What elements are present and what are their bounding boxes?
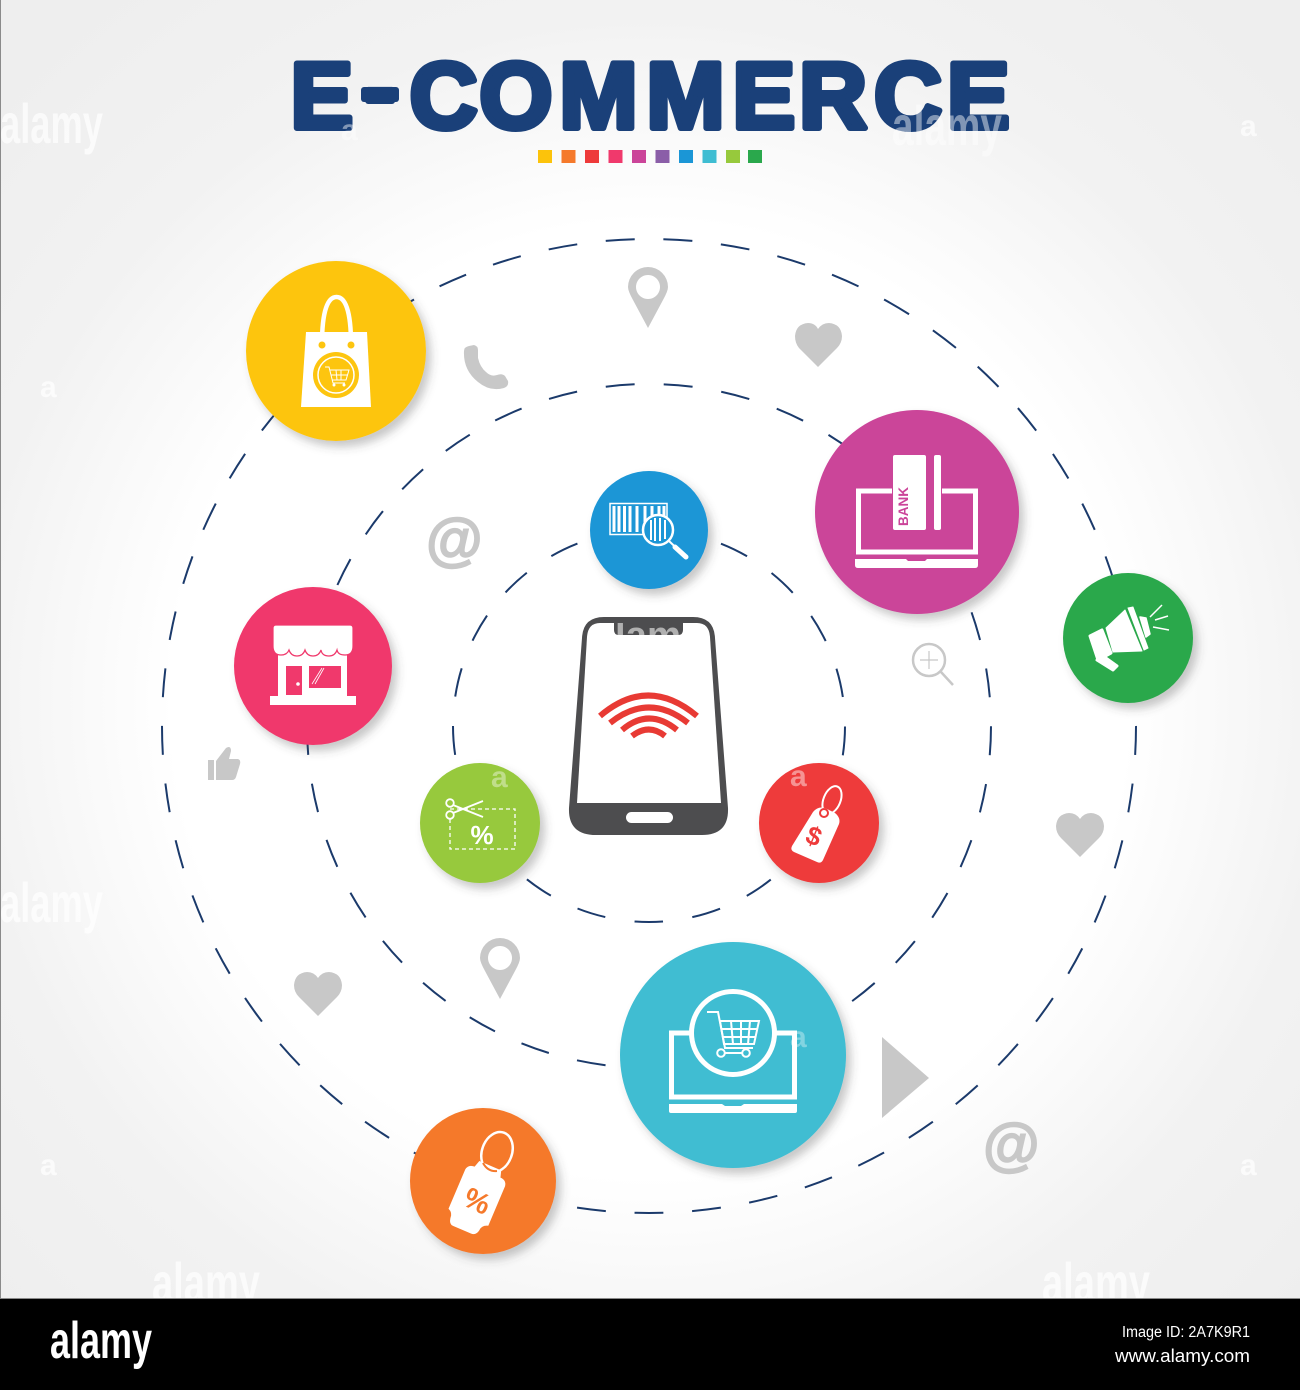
icon: heart lower (294, 972, 342, 1016)
grey decorative icons (208, 267, 1104, 1177)
wifi signal (600, 696, 697, 736)
icon: smartphone (569, 615, 728, 835)
awning (273, 625, 353, 656)
percent sign: % (470, 820, 494, 850)
door (286, 666, 302, 695)
megaphone body (1090, 607, 1150, 670)
watermarks: alamy (0, 92, 103, 155)
icon: magnifier (913, 644, 953, 685)
shop wall (278, 650, 347, 696)
tag knot (483, 1163, 497, 1171)
icon: thumbs up (208, 747, 240, 780)
image id: Image ID: 2A7K9R1 (1122, 1324, 1250, 1341)
barcode (610, 504, 667, 534)
cart ring (692, 992, 774, 1074)
tag body (443, 1157, 510, 1239)
colour swatches (538, 150, 762, 163)
laptop base (855, 559, 978, 568)
cart (707, 1012, 759, 1057)
watermark letter: a (491, 761, 508, 794)
phone screen (577, 623, 721, 803)
circle: discount tag (orange) (410, 1108, 556, 1254)
magnifier lens (643, 515, 673, 545)
circle: megaphone (green) (1063, 573, 1193, 703)
window (309, 666, 341, 688)
shop base (270, 696, 356, 705)
title watermark: alamy (892, 94, 1002, 157)
watermarks: alamy (152, 1251, 260, 1314)
title watermark: a (341, 114, 358, 147)
laptop screen (858, 491, 976, 552)
icon: location pin top (628, 267, 668, 328)
scissors (446, 799, 483, 819)
bag handle (322, 297, 351, 344)
circle: coupon (lime) (420, 761, 540, 883)
notch watermark: lam (615, 615, 681, 657)
bag cart badge (313, 352, 359, 398)
watermarks: alamy (1042, 1251, 1150, 1314)
sound rays (1150, 605, 1169, 630)
icon: play triangle (882, 1037, 929, 1118)
icon: location pin lower (480, 938, 520, 999)
icon: at sign lower: @ (983, 1112, 1040, 1177)
tag string (819, 783, 845, 817)
watermark letter: a (790, 760, 807, 793)
tag string (476, 1128, 518, 1176)
watermarks: alamy (0, 871, 103, 934)
icon: heart top (795, 323, 842, 367)
watermarks: a (1240, 110, 1257, 143)
circle: barcode search (blue) (590, 471, 708, 589)
percent sign: % (458, 1182, 495, 1222)
icon: heart right (1056, 813, 1104, 857)
website: www.alamy.com (1114, 1346, 1250, 1366)
title: E-COMMERCE (290, 34, 1010, 148)
circle: cart laptop (teal) (620, 942, 846, 1168)
home button (626, 812, 673, 823)
watermarks: a (1240, 1149, 1257, 1182)
circle: shop (pink) (234, 587, 392, 745)
circle: bank card laptop (magenta) (815, 410, 1019, 614)
watermarks: a (40, 371, 57, 404)
icon: phone handset (464, 345, 508, 389)
laptop base (669, 1104, 797, 1113)
tag body (791, 808, 840, 863)
bag body (301, 332, 371, 407)
dashed coupon (450, 809, 515, 849)
laptop screen (672, 1033, 794, 1097)
watermarks: a (40, 1149, 57, 1182)
BANK label: BANK (896, 487, 911, 526)
magnifier handle (669, 541, 687, 558)
dashed rings (162, 239, 1136, 1213)
title watermark (341, 94, 1002, 157)
bottom black bar (0, 1298, 1300, 1390)
watermark letter: a (790, 1021, 807, 1054)
alamy logo: alamy (50, 1312, 152, 1370)
icon: at sign upper: @ (426, 507, 483, 572)
phone notch (614, 622, 683, 635)
circle: shopping bag (yellow) (246, 261, 426, 441)
bank card (893, 455, 926, 530)
circle: price tag (red) (759, 760, 879, 883)
dollar sign: $ (802, 819, 827, 853)
